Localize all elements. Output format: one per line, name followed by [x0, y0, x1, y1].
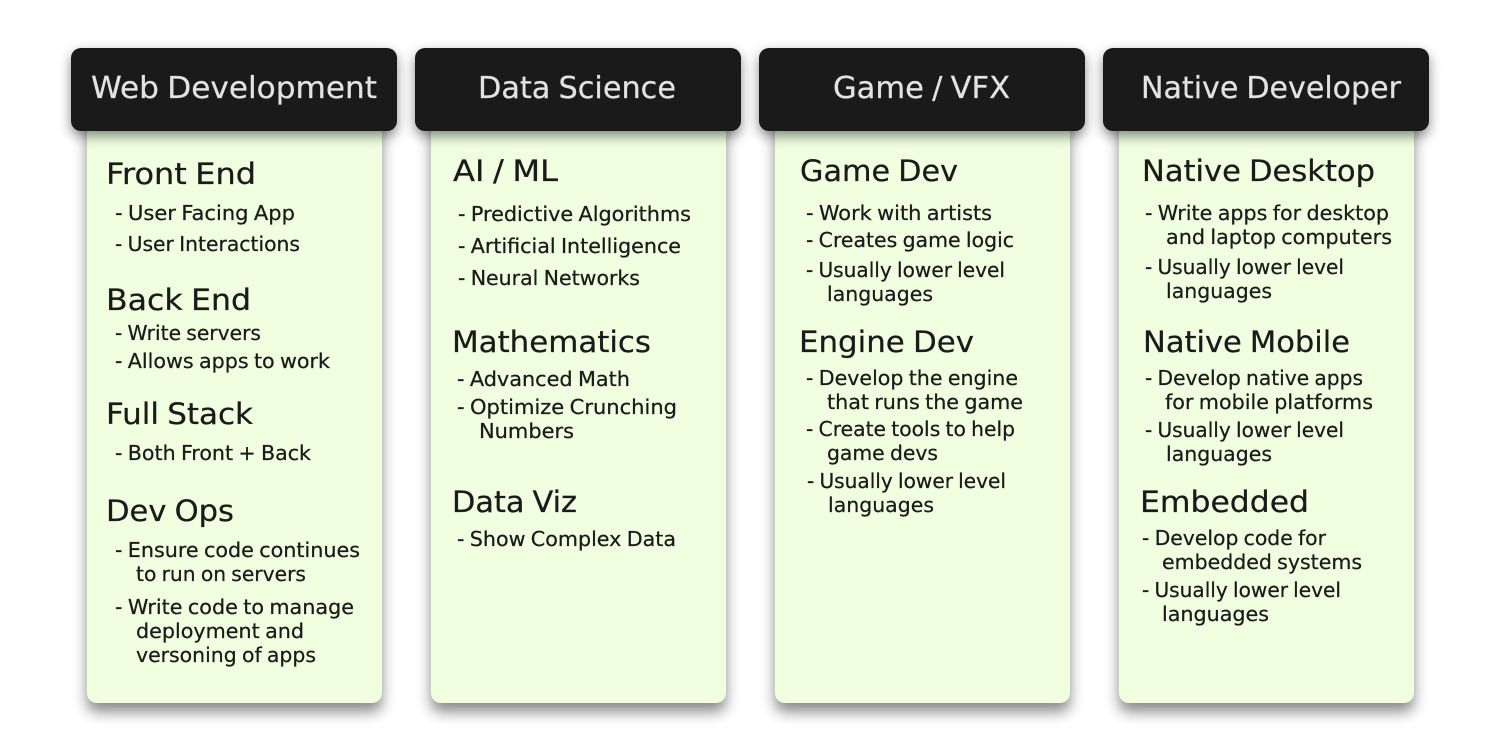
- section: Native Mobile: [1143, 325, 1373, 466]
- section: Back End: - Allows apps to work: [115, 349, 330, 373]
- column header: [415, 48, 741, 131]
- section: Full Stack: Full Stack: [106, 397, 253, 431]
- section: Game Dev: Game Dev: [800, 154, 958, 188]
- panel body: [431, 100, 726, 703]
- column header: [1103, 48, 1429, 131]
- section: Front End: Front End: [106, 157, 256, 191]
- section: AI / ML: - Predictive Algorithms: [458, 202, 691, 226]
- section: Native Mobile: languages: [1166, 442, 1272, 466]
- section: Engine Dev: that runs the game: [827, 390, 1023, 414]
- section: Native Mobile: for mobile platforms: [1165, 390, 1373, 414]
- section: Engine Dev: - Develop the engine: [806, 366, 1018, 390]
- section: Back End: - Write servers: [115, 321, 261, 345]
- section: Mathematics: [452, 325, 677, 443]
- section: Native Mobile: - Usually lower level: [1145, 418, 1344, 442]
- section: Game Dev: - Usually lower level: [806, 258, 1005, 282]
- section: Embedded: - Usually lower level: [1142, 578, 1341, 602]
- section: Game Dev: - Work with artists: [806, 201, 992, 225]
- section: Native Mobile: Native Mobile: [1143, 325, 1350, 359]
- section: Engine Dev: - Usually lower level: [807, 469, 1006, 493]
- section: Native Desktop: - Write apps for desktop: [1145, 201, 1389, 225]
- section: Engine Dev: - Create tools to help: [806, 417, 1015, 441]
- section: Mathematics: - Optimize Crunching: [457, 395, 677, 419]
- section: Back End: Back End: [106, 283, 251, 317]
- section: Front End: [106, 157, 300, 256]
- section: Data Viz: - Show Complex Data: [457, 527, 676, 551]
- panel body: [87, 100, 382, 703]
- section: Game Dev: languages: [827, 282, 933, 306]
- section: Engine Dev: Engine Dev: [799, 325, 974, 359]
- section: Front End: - User Facing App: [115, 201, 295, 225]
- section: Dev Ops: deployment and: [136, 619, 304, 643]
- section: Embedded: embedded systems: [1162, 550, 1362, 574]
- section: Native Desktop: and laptop computers: [1166, 225, 1392, 249]
- section: AI / ML: - Neural Networks: [458, 266, 640, 290]
- section: Native Mobile: - Develop native apps: [1145, 366, 1363, 390]
- section: Back End: [106, 283, 330, 373]
- panel: Data Science: [415, 48, 741, 703]
- section: Mathematics: - Advanced Math: [457, 367, 630, 391]
- section: Engine Dev: languages: [828, 493, 934, 517]
- column header: Data Science: [478, 71, 676, 106]
- section: Engine Dev: game devs: [827, 441, 938, 465]
- section: Mathematics: Numbers: [479, 419, 574, 443]
- section: Native Desktop: [1142, 154, 1392, 303]
- column header: Web Development: [91, 71, 377, 106]
- panel: Game / VFX: [759, 48, 1085, 703]
- section: Dev Ops: to run on servers: [136, 562, 306, 586]
- section: AI / ML: [453, 154, 691, 290]
- section: Engine Dev: [799, 325, 1023, 517]
- section: Dev Ops: - Write code to manage: [115, 595, 354, 619]
- panel body: [1119, 100, 1414, 703]
- section: AI / ML: AI / ML: [453, 154, 558, 188]
- section: AI / ML: - Artificial Intelligence: [458, 234, 681, 258]
- panel: Native Developer: [1103, 48, 1429, 703]
- column header: [71, 48, 397, 131]
- panel: Web Development: [71, 48, 397, 703]
- section: Game Dev: [800, 154, 1014, 306]
- column header: Native Developer: [1141, 71, 1402, 106]
- section: Game Dev: - Creates game logic: [806, 228, 1014, 252]
- section: Native Desktop: - Usually lower level: [1145, 255, 1344, 279]
- section: Mathematics: Mathematics: [452, 325, 651, 359]
- section: Embedded: languages: [1162, 602, 1269, 626]
- section: Dev Ops: [106, 494, 360, 667]
- section: Full Stack: - Both Front + Back: [115, 441, 311, 465]
- section: Embedded: - Develop code for: [1142, 526, 1327, 550]
- section: Embedded: Embedded: [1140, 485, 1309, 519]
- section: Embedded: [1140, 485, 1362, 626]
- section: Front End: - User Interactions: [115, 232, 300, 256]
- column header: Game / VFX: [833, 71, 1010, 106]
- section: Full Stack: [106, 397, 311, 465]
- section: Data Viz: [452, 485, 676, 551]
- panel body: [775, 100, 1070, 703]
- section: Native Desktop: Native Desktop: [1142, 154, 1375, 188]
- section: Dev Ops: versoning of apps: [136, 643, 316, 667]
- section: Native Desktop: languages: [1166, 279, 1272, 303]
- section: Data Viz: Data Viz: [452, 485, 577, 519]
- section: Dev Ops: - Ensure code continues: [115, 538, 360, 562]
- section: Dev Ops: Dev Ops: [106, 494, 234, 528]
- column header: [759, 48, 1085, 131]
